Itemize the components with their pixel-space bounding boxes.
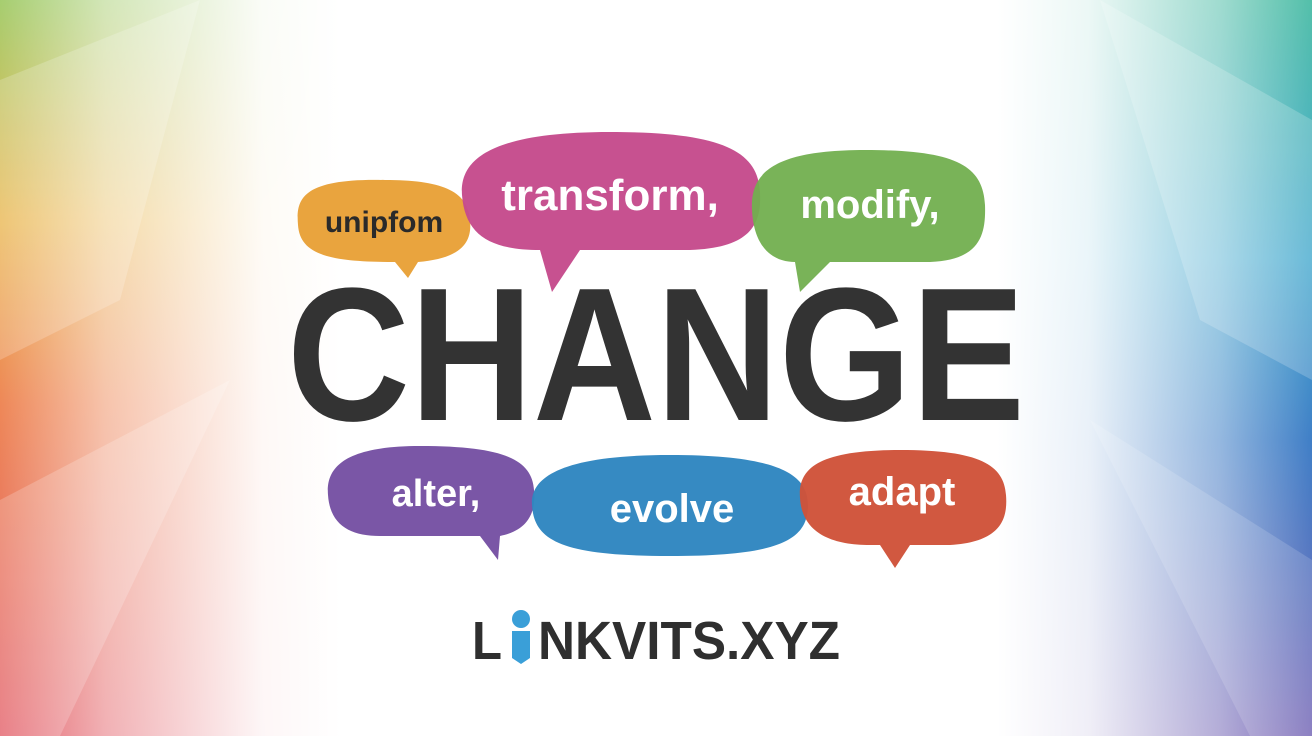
bubble: adapt: adapt xyxy=(849,470,955,514)
bubble: adapt xyxy=(800,450,1006,568)
bubble: evolve: evolve xyxy=(610,487,734,531)
bubble: alter: alter, xyxy=(392,473,480,515)
bubble: transform: transform, xyxy=(501,171,719,220)
icon: blue i xyxy=(512,610,530,664)
bubble: transform xyxy=(462,132,760,292)
logo: LINKVITS.XYZ: L xyxy=(472,611,502,671)
bubble: evolve xyxy=(532,455,808,556)
bubble: alter xyxy=(328,446,534,560)
bubble: modify: modify, xyxy=(800,183,940,227)
bubble: modify xyxy=(752,150,985,292)
bubble: unipfom: unipfom xyxy=(325,206,443,239)
bubble: unipfom xyxy=(298,180,470,278)
heading: CHANGE: CHANGE xyxy=(287,249,1025,461)
logo: LINKVITS.XYZ: NKVITS.XYZ xyxy=(538,611,840,671)
